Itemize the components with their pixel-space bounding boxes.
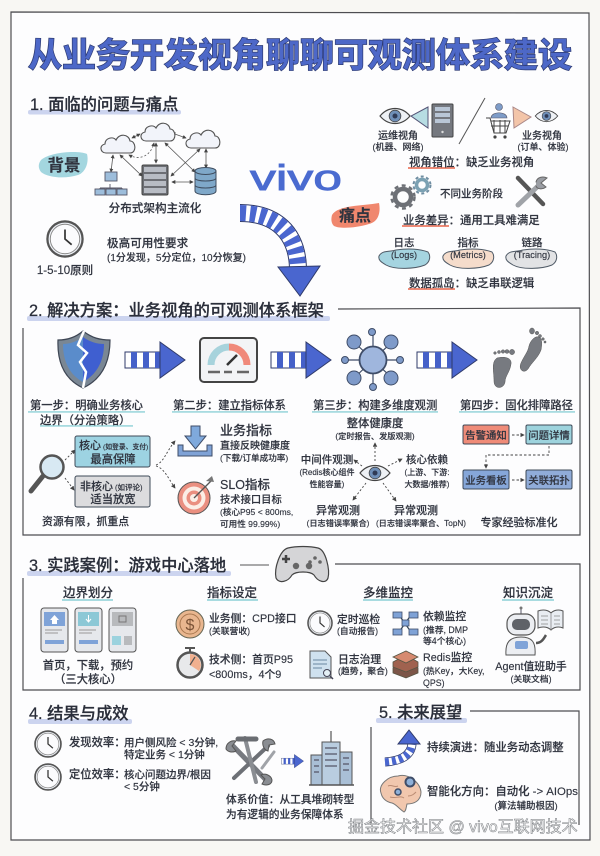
text: business view label: (订单、体验) bbox=[518, 141, 568, 152]
card: non-core bbox=[75, 476, 150, 507]
text: ops view label: 运维视角 bbox=[378, 129, 418, 142]
text: agent assistant: Agent值班助手 bbox=[495, 659, 567, 673]
flow: topology: 关联拓扑 bbox=[528, 474, 570, 487]
icon: phones bbox=[41, 608, 136, 652]
text: business side bbox=[209, 611, 297, 636]
icon: network hub bbox=[342, 328, 404, 390]
text: overall health: (定时报告、发版观测) bbox=[335, 431, 415, 441]
card: non-core: 非核心 (如评论) bbox=[80, 479, 143, 493]
text: business side: (关联营收) bbox=[209, 625, 250, 636]
icon: gears bbox=[392, 176, 430, 208]
text: discovery efficiency bbox=[69, 735, 218, 761]
icon: gamepad bbox=[276, 546, 329, 582]
text: three core pages: （三大核心） bbox=[54, 672, 122, 686]
flow: topology bbox=[526, 470, 572, 489]
text: ops view label: (机器、网络) bbox=[372, 141, 424, 152]
icon: redis stack bbox=[393, 651, 418, 678]
text: availability requirement: (1分发现，5分定位，10分恢复) bbox=[107, 251, 246, 264]
icon: tools pile bbox=[226, 738, 275, 785]
label: background: 背景 bbox=[48, 156, 80, 175]
card: core: 核心 (如登录、支付) bbox=[79, 438, 148, 452]
icon: wrench and screwdriver bbox=[518, 177, 547, 205]
text: business metrics bbox=[220, 423, 290, 463]
text: discovery efficiency: 发现效率： bbox=[69, 735, 126, 749]
text: log governance bbox=[338, 652, 388, 676]
line to gamepad bbox=[240, 564, 269, 566]
text: anomaly observation right: 异常观测 bbox=[394, 503, 438, 517]
heading: section 1: 1. 面临的问题与痛点 bbox=[30, 95, 178, 114]
flow: issue details bbox=[526, 425, 572, 444]
card: core: 最高保障 bbox=[90, 452, 136, 466]
icon: log document bbox=[310, 651, 333, 679]
divider slash bbox=[459, 98, 485, 144]
icon: magnifier bbox=[31, 456, 64, 491]
text: intelligence: 智能化方向：自动化 -> AIOps bbox=[427, 784, 578, 798]
text: business side: 业务侧：CPD接口 bbox=[209, 611, 297, 625]
text: anomaly observation right: (日志错误率聚合、TopN) bbox=[376, 518, 466, 528]
icon: clock bbox=[47, 221, 83, 257]
text: business difference: 业务差异：通用工具难满足 bbox=[403, 213, 540, 227]
panel: section 4 results bbox=[28, 705, 355, 821]
text: SLO metrics: 技术接口目标 bbox=[220, 493, 282, 506]
text: core dependencies: 核心依赖 bbox=[406, 453, 448, 466]
icon group: business view bbox=[486, 104, 558, 139]
text: anomaly observation left: (日志错误率聚合) bbox=[307, 518, 370, 528]
subheading: knowledge: 知识沉淀 bbox=[503, 585, 553, 600]
step heading: step 1: 边界（分治策略） bbox=[40, 413, 130, 427]
arrow: small striped bbox=[281, 754, 304, 768]
slab: tracing: 链路 bbox=[522, 236, 543, 249]
arrow: curved striped arrow bbox=[240, 213, 320, 296]
icon: stopwatch bbox=[178, 648, 202, 678]
text: location efficiency: 定位效率： bbox=[69, 767, 126, 781]
text: system value: 体系价值：从工具堆砌转型 bbox=[226, 793, 355, 806]
card: core bbox=[75, 436, 150, 467]
step heading: step 1 bbox=[28, 398, 145, 427]
diagram: distributed architecture bbox=[95, 123, 220, 195]
slab: tracing bbox=[506, 236, 557, 268]
text: anomaly observation right bbox=[376, 503, 466, 528]
icon: building bbox=[309, 731, 354, 785]
icon: inspection clock bbox=[308, 611, 332, 635]
slab: metrics bbox=[443, 236, 494, 268]
icon group: ops view bbox=[380, 104, 453, 137]
subheading: multi-dim monitoring: 多维监控 bbox=[363, 585, 413, 600]
arrows: metrics branches bbox=[156, 441, 175, 488]
label: pain points: 痛点 bbox=[339, 206, 371, 225]
icon: clock discovery bbox=[35, 731, 61, 757]
logo: vivo: vivo bbox=[250, 157, 342, 198]
panel: section 1 problems and pain points bbox=[28, 95, 568, 296]
text: availability requirement bbox=[107, 236, 246, 264]
text: SLO metrics: SLO指标 bbox=[220, 477, 271, 492]
slab: metrics: 指标 bbox=[458, 236, 479, 249]
label: pain points bbox=[331, 203, 380, 228]
flow: dashboard: 业务看板 bbox=[465, 474, 507, 487]
heading: section 5: 5. 未来展望 bbox=[379, 704, 462, 722]
text: system value bbox=[226, 793, 355, 821]
text: discovery efficiency: 特定业务 < 1分钟 bbox=[124, 748, 205, 761]
text: scheduled inspection: (自动报告) bbox=[337, 625, 378, 636]
text: location efficiency: < 5分钟 bbox=[124, 780, 160, 793]
text: business metrics: 直接反映健康度 bbox=[220, 439, 290, 452]
text: view mismatch: 视角错位：缺乏业务视角 bbox=[409, 155, 534, 169]
text: redis monitoring: QPS) bbox=[423, 678, 445, 688]
text: location efficiency: 核心问题边界/根因 bbox=[124, 768, 211, 781]
text: middleware observation: 中间件观测 bbox=[301, 453, 353, 466]
text: log governance: 日志治理 bbox=[338, 652, 381, 666]
icon: robot with book bbox=[506, 606, 563, 655]
text: continuous evolution: 持续演进：随业务动态调整 bbox=[427, 740, 564, 754]
text: middleware observation: (Redis核心组件 bbox=[299, 467, 355, 477]
text: scheduled inspection bbox=[337, 612, 380, 636]
label: background bbox=[39, 152, 88, 177]
flow: alert bbox=[463, 425, 509, 444]
icon: coin bbox=[176, 610, 204, 638]
panel: section 2 solution framework bbox=[23, 301, 580, 535]
text: business metrics: (下载/订单成功率) bbox=[220, 452, 288, 463]
caption: distributed architecture: 分布式架构主流化 bbox=[109, 201, 202, 215]
slab: logs: 日志 bbox=[394, 236, 414, 249]
step heading: step 1: 第一步：明确业务核心 bbox=[30, 398, 143, 412]
slab: logs bbox=[379, 236, 430, 268]
subheading: boundaries: 边界划分 bbox=[63, 585, 113, 600]
arrows: flow connectors bbox=[486, 435, 549, 480]
text: intelligence bbox=[427, 784, 578, 812]
text: expert experience: 专家经验标准化 bbox=[480, 515, 558, 529]
arrow: continuous evolution bbox=[385, 730, 420, 762]
text: three core pages bbox=[43, 658, 133, 686]
text: business view label bbox=[518, 129, 568, 152]
icon: clock location bbox=[35, 764, 61, 790]
panel: section 3 practice case bbox=[23, 546, 580, 690]
panel: section 5 outlook bbox=[371, 704, 579, 825]
text: limited resources: 资源有限，抓重点 bbox=[42, 514, 129, 528]
text: business metrics: 业务指标 bbox=[220, 423, 272, 438]
text: availability requirement: 极高可用性要求 bbox=[107, 236, 189, 250]
text: different business stages: 不同业务阶段 bbox=[440, 187, 503, 200]
text: dependency monitoring bbox=[423, 609, 468, 646]
text: anomaly observation left bbox=[307, 503, 370, 528]
text: SLO metrics: 可用性 99.99%) bbox=[220, 518, 280, 529]
text: overall health bbox=[335, 416, 415, 441]
text: core dependencies: (上游、下游: bbox=[405, 467, 449, 477]
slab: metrics: (Metrics) bbox=[450, 250, 486, 260]
step heading: step 4: 第四步：固化排障路径 bbox=[460, 398, 573, 412]
text: redis monitoring bbox=[423, 650, 484, 688]
icon: download bbox=[178, 426, 212, 456]
text: anomaly observation left: 异常观测 bbox=[316, 503, 360, 517]
text: dependency monitoring: 等4个核心) bbox=[423, 635, 466, 646]
slab: tracing: (Tracing) bbox=[514, 250, 550, 260]
text: redis monitoring: (热Key，大Key, bbox=[423, 665, 484, 676]
text: core dependencies bbox=[405, 453, 450, 489]
text: core dependencies: 大数据/推荐) bbox=[405, 479, 450, 489]
text: agent assistant: (关联文档) bbox=[510, 673, 552, 684]
heading: section 3: 3. 实践案例：游戏中心落地 bbox=[29, 556, 226, 575]
icon: dependency graph bbox=[393, 612, 418, 635]
text: three core pages: 首页，下载，预约 bbox=[43, 658, 133, 672]
flow: alert: 告警通知 bbox=[465, 429, 507, 442]
slab: logs: (Logs) bbox=[391, 250, 417, 260]
arrow: step 2 to step 3 bbox=[271, 342, 331, 378]
step heading: step 2: 第二步：建立指标体系 bbox=[173, 398, 286, 412]
icon: shield bbox=[58, 331, 110, 388]
label: 1-5-10 rule: 1-5-10原则 bbox=[37, 264, 93, 277]
text: SLO metrics: (核心P95 < 800ms, bbox=[220, 506, 293, 517]
watermark: 掘金技术社区 @ vivo互联网技术 bbox=[348, 818, 578, 836]
text: ops view label bbox=[372, 129, 424, 152]
text: log governance: (趋势，聚合) bbox=[338, 665, 388, 676]
text: overall health: 整体健康度 bbox=[347, 416, 403, 430]
arrow: step 3 to step 4 bbox=[417, 342, 477, 378]
step heading: step 3: 第三步：构建多维度观测 bbox=[313, 398, 437, 412]
icon: brain with gears bbox=[380, 775, 421, 812]
text: business view label: 业务视角 bbox=[522, 129, 562, 142]
text: technical side bbox=[209, 652, 293, 681]
text: SLO metrics bbox=[220, 477, 293, 529]
text: middleware observation bbox=[299, 453, 355, 489]
icon: coin: $ bbox=[186, 617, 195, 634]
text: location efficiency bbox=[69, 767, 211, 793]
heading: section 4: 4. 结果与成效 bbox=[29, 705, 129, 723]
text: scheduled inspection: 定时巡检 bbox=[337, 612, 380, 626]
text: dependency monitoring: 依赖监控 bbox=[423, 609, 466, 623]
subheading: metrics setting: 指标设定 bbox=[207, 585, 257, 600]
icon: gauge dashboard bbox=[200, 338, 257, 382]
flow: dashboard bbox=[463, 470, 509, 489]
text: middleware observation: 性能容量) bbox=[310, 479, 345, 489]
text: technical side: 技术侧：首页P95 bbox=[209, 652, 293, 666]
icon: observing eye with arrows bbox=[353, 443, 402, 501]
arrows: magnifier branches bbox=[65, 450, 75, 490]
flow: issue details: 问题详情 bbox=[528, 429, 570, 442]
title: 从业务开发视角聊聊可观测体系建设 bbox=[28, 37, 572, 75]
icon: footprints bbox=[493, 328, 546, 388]
arrow: step 1 to step 2 bbox=[125, 342, 185, 378]
text: technical side: <800ms，4个9 bbox=[209, 668, 281, 681]
card: non-core: 适当放宽 bbox=[90, 492, 136, 506]
text: agent assistant bbox=[495, 659, 567, 684]
text: system value: 为有逻辑的业务保障体系 bbox=[226, 808, 344, 821]
text: redis monitoring: Redis监控 bbox=[423, 650, 472, 664]
heading: section 2: 2. 解决方案：业务视角的可观测体系框架 bbox=[29, 301, 324, 320]
text: intelligence: (算法辅助根因) bbox=[494, 800, 558, 812]
text: data silos: 数据孤岛：缺乏串联逻辑 bbox=[409, 276, 534, 290]
icon: target bbox=[178, 476, 214, 514]
text: discovery efficiency: 用户侧风险 < 3分钟, bbox=[124, 736, 218, 749]
text: dependency monitoring: (推荐, DMP bbox=[423, 624, 468, 635]
